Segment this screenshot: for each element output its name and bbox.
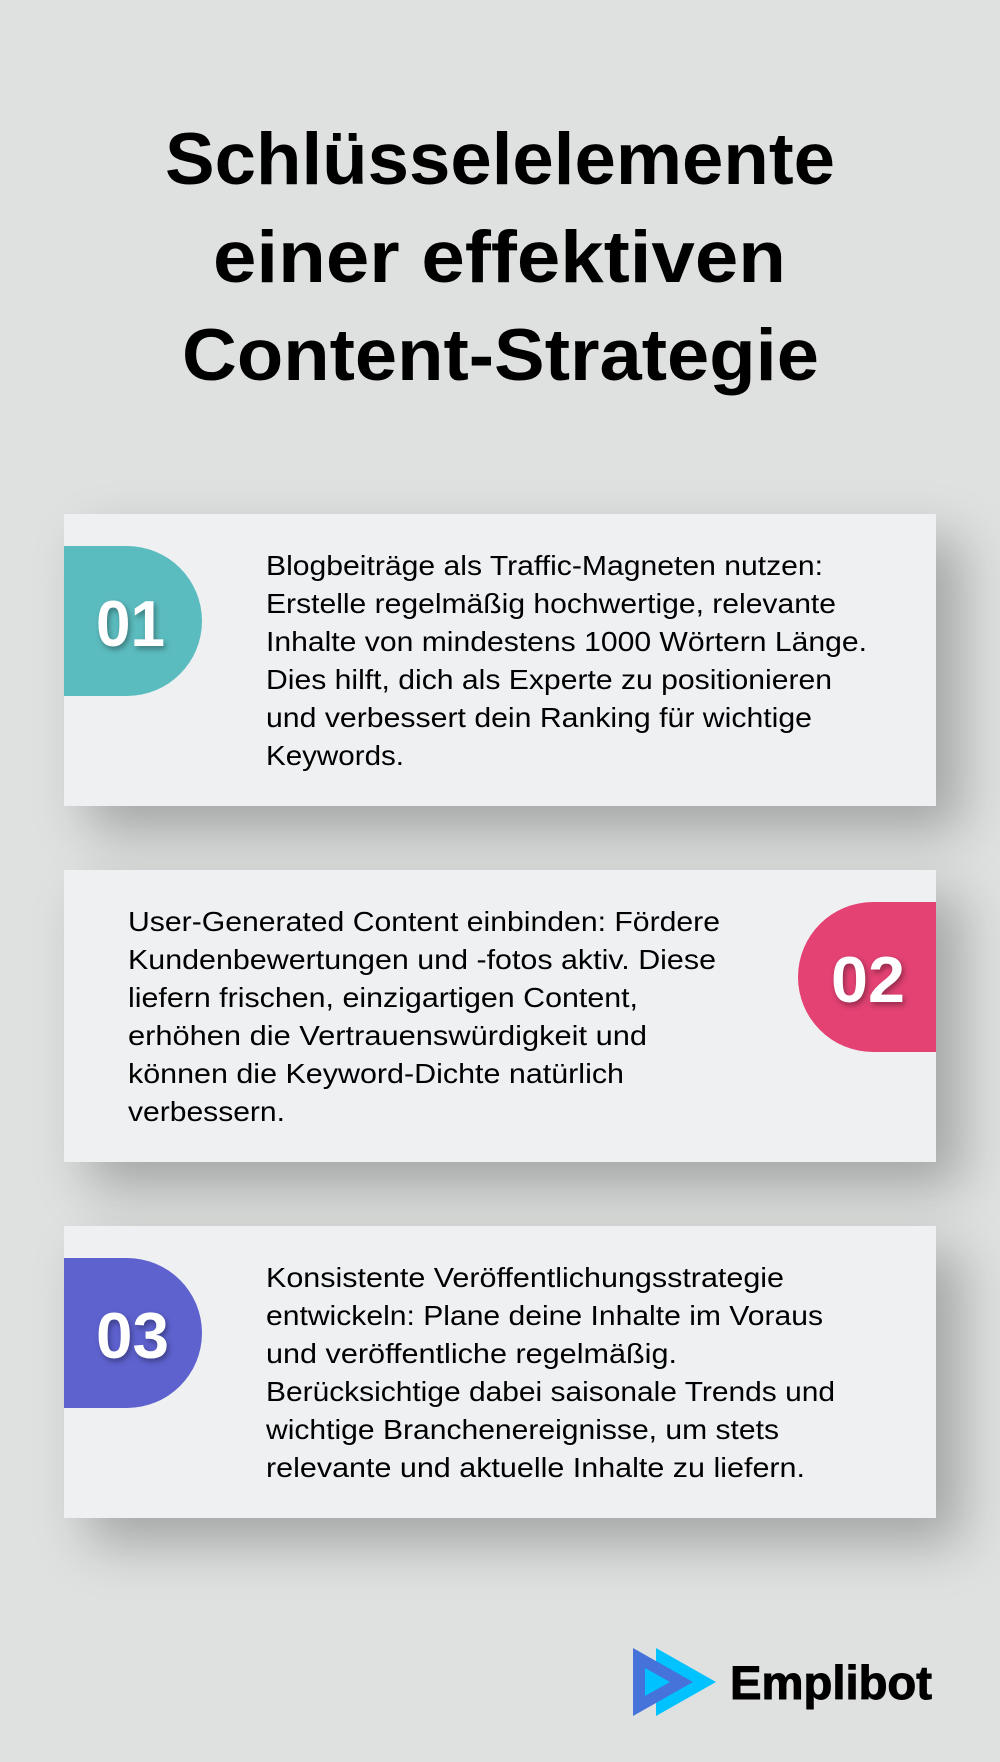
text block: card 3: entwickeln: Plane deine Inhalte im Voraus	[266, 1300, 823, 1331]
text block: card 3: und veröffentliche regelmäßig.	[266, 1338, 677, 1369]
text block: card 3: wichtige Branchenereignisse, um stets	[265, 1414, 779, 1445]
title: einer effektiven	[213, 217, 786, 298]
text block: card 1: Blogbeiträge als Traffic-Magneten nutzen:	[266, 550, 823, 581]
title: Content-Strategie	[182, 315, 819, 396]
logo: Emplibot	[633, 1648, 932, 1716]
icon: play triangles	[633, 1648, 716, 1716]
logo wordmark: Emplibot	[730, 1656, 932, 1709]
text block: card 2: verbessern.	[128, 1096, 285, 1127]
text block: card 3: Berücksichtige dabei saisonale Trends und	[266, 1376, 835, 1407]
text block: card 1: Erstelle regelmäßig hochwertige, relevante	[266, 588, 836, 619]
text block: card 2: User-Generated Content einbinden: Fördere	[128, 906, 720, 937]
number badge 03	[64, 1258, 202, 1408]
text block: card 1	[266, 550, 867, 771]
number badge 01	[64, 546, 202, 696]
text block: card 2: können die Keyword-Dichte natürlich	[128, 1058, 624, 1089]
number 02: 02	[831, 943, 905, 1016]
panel: card 1 background	[64, 514, 936, 806]
text block: card 1: Inhalte von mindestens 1000 Wörtern Länge.	[266, 626, 867, 657]
text block: card 1: Dies hilft, dich als Experte zu positionieren	[266, 664, 832, 695]
text block: card 2: Kundenbewertungen und -fotos aktiv. Diese	[128, 944, 716, 975]
text block: card 2	[128, 906, 720, 1127]
panel: card 2 background	[64, 870, 936, 1162]
number 03: 03	[96, 1299, 169, 1372]
text block: card 3: Konsistente Veröffentlichungsstrategie	[266, 1262, 784, 1293]
text block: card 3: relevante und aktuelle Inhalte zu liefern.	[266, 1452, 805, 1483]
number badge 02	[798, 902, 936, 1052]
text block: card 1: und verbessert dein Ranking für wichtige	[266, 702, 812, 733]
title	[165, 119, 835, 396]
text block: card 3	[265, 1262, 835, 1483]
text block: card 1: Keywords.	[266, 740, 404, 771]
number 01: 01	[96, 587, 165, 660]
panel: card 3 background	[64, 1226, 936, 1518]
title: Schlüsselelemente	[165, 119, 835, 200]
text block: card 2: liefern frischen, einzigartigen Content,	[128, 982, 638, 1013]
text block: card 2: erhöhen die Vertrauenswürdigkeit und	[128, 1020, 647, 1051]
